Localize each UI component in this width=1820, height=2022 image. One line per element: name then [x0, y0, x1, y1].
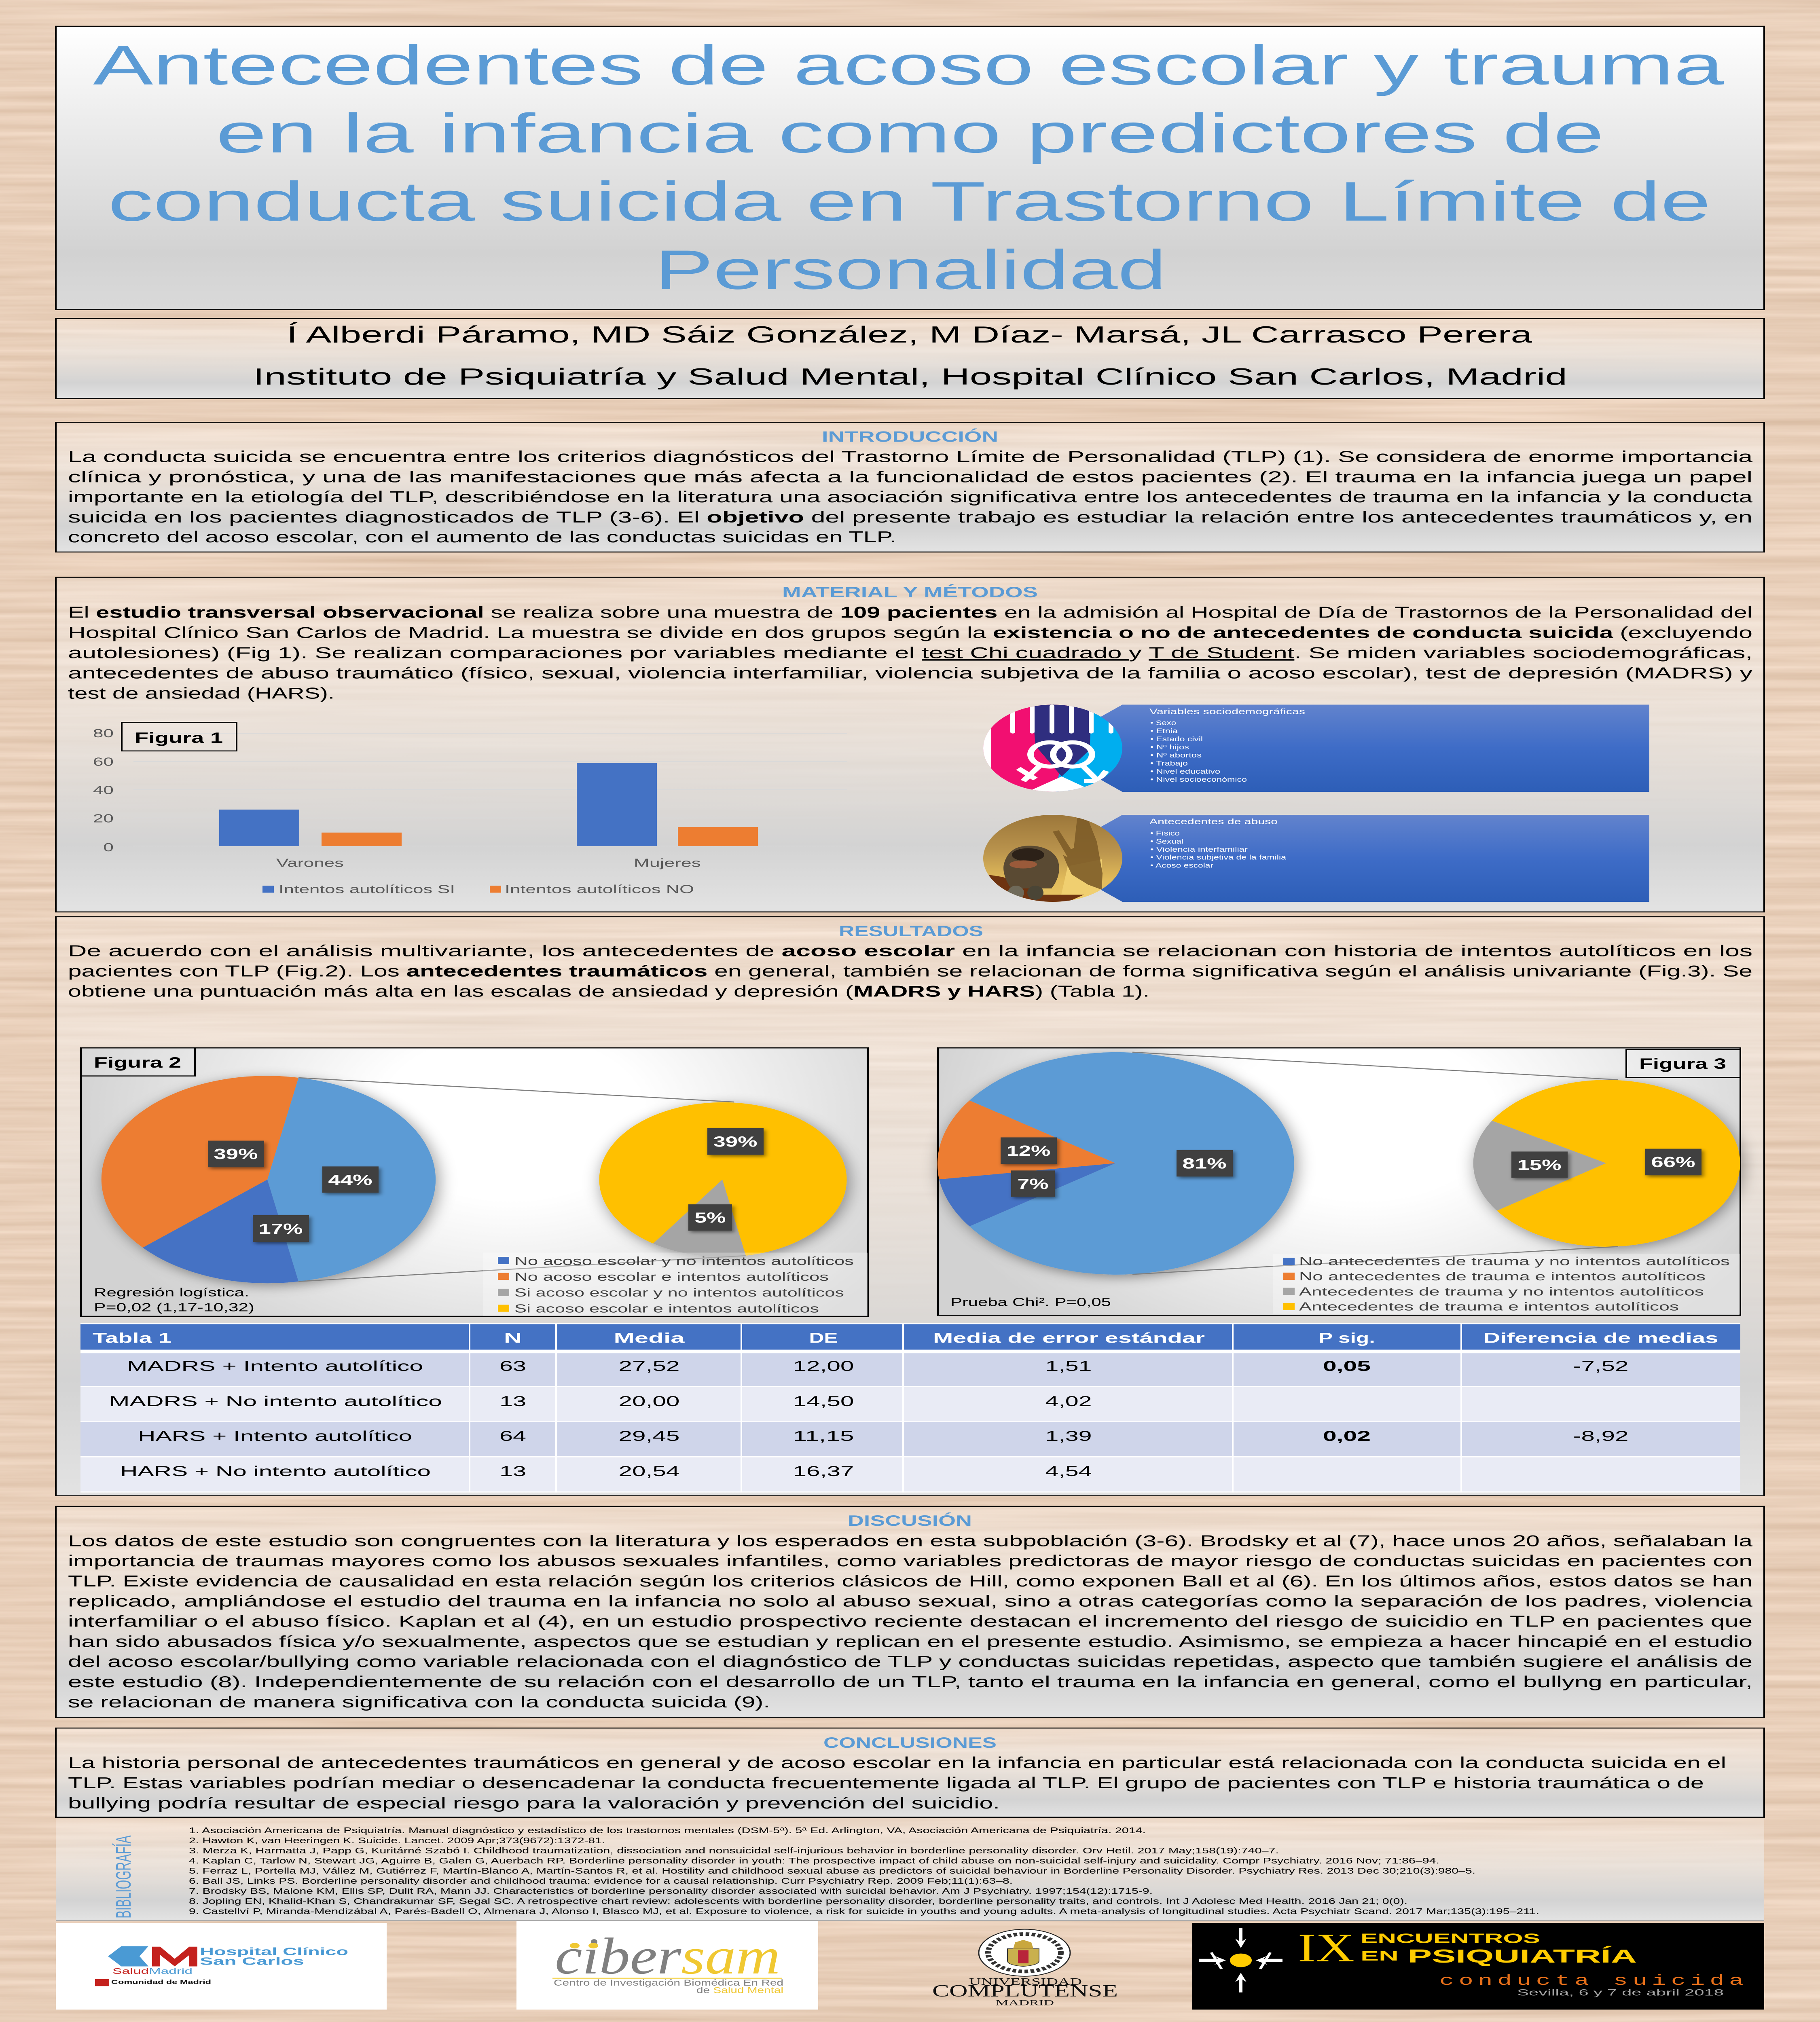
text block: conclusiones: [68, 1754, 1726, 1812]
text block: discusion: interfamiliar o el abuso físico. Kaplan et al (4), en un estudio prospectivo reciente destacan el incremento del riesgo de suicidio en TLP en pacientes que: [68, 1612, 1752, 1630]
secondary pie figura 2: [599, 1102, 847, 1257]
panel: variables sociodemograficas: • Etnia: [1150, 727, 1178, 735]
text block: discusion: replicado, ampliándose el estudio del trauma en la infancia no solo al abuso sexual, sino a otras categorías como la separación de los padres, violencia: [68, 1592, 1752, 1610]
figure label: figura 3: Figura 3: [1639, 1055, 1726, 1072]
legend figura 2: No acoso escolar y no intentos autolíticos: [514, 1255, 854, 1268]
table row: HARS + intento: 29,45: [618, 1428, 679, 1444]
icon: gender symbols circle: [983, 704, 1122, 792]
text block: introduccion: importante en la etiología del TLP, describiéndose en la literatura una asociación significativa entre los antecedentes de trauma en la infancia y la conducta: [68, 488, 1752, 506]
table row: MADRS + intento: 1,51: [1045, 1358, 1092, 1374]
panel: resultados: [56, 917, 1764, 1496]
table row: HARS + intento: 0,02: [1323, 1428, 1371, 1444]
panel: variables sociodemograficas: • Nivel educativo: [1150, 768, 1220, 775]
text block: references: 3. Merza K, Harmatta J, Papp G, Kuritárné Szabó I. Childhood traumatization, dissociation and nonsuicidal self-injurious behavior in borderline personality disorder. Orv Hetil. 2017 May;158(19):740–7.: [189, 1846, 1279, 1855]
bar chart: figura 1: [93, 727, 847, 896]
data labels figura 2: 39%: [713, 1134, 758, 1150]
table row: HARS + intento: -8,92: [1573, 1428, 1629, 1444]
logo: Universidad Complutense: MADRID: [996, 1999, 1054, 2007]
text block: material y metodos: El estudio transversal observacional se realiza sobre una muestra de 109 pacientes en la admisión al Hospital de Día de Trastornos de la Personalidad del: [68, 603, 1752, 621]
text block: references: 1. Asociación Americana de Psiquiatría. Manual diagnóstico y estadístico de los trastornos mentales (DSM-5ª). 5ª Ed. Arlington, VA, Asociación Americana de Psiquiatría. 2014.: [189, 1826, 1146, 1835]
title text: en la infancia como predictores de: [216, 102, 1604, 164]
logo: Hospital Clinico San Carlos: Hospital Clínico: [200, 1946, 348, 1957]
text block: references: 4. Kaplan C, Tarlow N, Stewart JG, Aguirre B, Galen G, Auerbach RP. Borderline personality disorder in youth: The prospective impact of child abuse on non-suicidal self-injury and suicidality. Compr Psychiatry. 2016 Nov; 71:86–94.: [189, 1856, 1439, 1865]
bar chart: figura 1: 0: [103, 841, 114, 854]
data labels figura 3: 7%: [1017, 1176, 1048, 1192]
table header: Diferencia de medias: [1484, 1330, 1718, 1346]
icon: complutense crest: [979, 1929, 1070, 1976]
logo: IX Encuentros en Psiquiatria: EN: [1361, 1948, 1399, 1964]
data labels figura 2: 17%: [259, 1221, 303, 1237]
data labels figura 2: 5%: [695, 1210, 726, 1226]
logo: Universidad Complutense: [932, 1929, 1118, 2007]
logo: cibersam: [516, 1921, 818, 2009]
table row: MADRS + no intento: MADRS + No intento autolítico: [109, 1393, 442, 1409]
table header: DE: [809, 1330, 838, 1346]
table header: Tabla 1: [93, 1330, 171, 1346]
legend figura 2: Si acoso escolar e intentos autolíticos: [514, 1302, 819, 1315]
panel: antecedentes de abuso: • Violencia subjetiva de la familia: [1150, 854, 1287, 861]
table row: MADRS + no intento: 20,00: [618, 1393, 679, 1409]
table row: MADRS + intento: 27,52: [618, 1358, 679, 1374]
table row: MADRS + no intento: 4,02: [1045, 1393, 1092, 1409]
data labels figura 2: 39%: [214, 1146, 258, 1162]
text block: introduccion: La conducta suicida se encuentra entre los criterios diagnósticos del Trastorno Límite de Personalidad (TLP) (1). Se considera de enorme importancia: [68, 448, 1752, 465]
panel: variables sociodemograficas: Variables sociodemográficas: [1149, 708, 1305, 716]
bar chart: figura 1: Mujeres: [634, 857, 701, 869]
table row: MADRS + no intento: 13: [499, 1393, 526, 1409]
table: tabla 1: [80, 1323, 1740, 1493]
table row: HARS + no intento: 16,37: [793, 1464, 854, 1479]
logo: cibersam: Centro de Investigación Biomédica En Red: [554, 1978, 783, 1988]
text block: references: 9. Castellví P, Miranda-Mendizábal A, Parés-Badell O, Almenara J, Alonso I, Blasco MJ, et al. Exposure to violence, a risk for suicide in youths and young adults. A meta-analysis of longitudinal studies. Acta Psychiatr Scand. 2017 Mar;135(3):195–211.: [189, 1907, 1539, 1916]
panel: introduccion: [56, 422, 1764, 552]
heading: material y metodos: MATERIAL Y MÉTODOS: [782, 584, 1038, 601]
text block: resultados: De acuerdo con el análisis multivariante, los antecedentes de acoso escolar en la infancia se relacionan con historia de intentos autolíticos en los: [68, 942, 1752, 960]
logo: IX Encuentros en Psiquiatria: conducta suicida: [1439, 1972, 1744, 1990]
table row: HARS + intento: 64: [499, 1428, 526, 1444]
panel: variables sociodemograficas: [1045, 704, 1649, 792]
legend figura 3: No antecedentes de trauma y no intentos autolíticos: [1299, 1255, 1730, 1268]
logo: Universidad Complutense: UNIVERSIDAD: [969, 1976, 1082, 1987]
bar chart: figura 1: 80: [93, 727, 114, 740]
panel: antecedentes de abuso: • Físico: [1150, 829, 1180, 837]
panel: conclusiones: [56, 1728, 1764, 1817]
table header: N: [504, 1330, 522, 1346]
data labels figura 3: [1001, 1137, 1701, 1197]
text block: discusion: este estudio (8). Independientemente de su relación con el desarrollo de un TLP, tanto el trauma en la infancia en general, como el bullyng en particular,: [68, 1673, 1752, 1690]
figure label: figura 2: Figura 2: [94, 1054, 181, 1071]
panel: antecedentes de abuso: • Sexual: [1150, 838, 1183, 845]
chart: figura 3: [938, 1048, 1740, 1315]
logo: cibersam: de Salud Mental: [696, 1986, 783, 1995]
note: regresion logistica: Regresión logística.: [94, 1286, 249, 1299]
bar chart: figura 1: Intentos autolíticos SI: [279, 883, 455, 896]
table row: HARS + no intento: 20,54: [618, 1464, 679, 1479]
bar chart: figura 1: Varones: [276, 857, 344, 869]
legend figura 3: No antecedentes de trauma e intentos autolíticos: [1299, 1270, 1706, 1283]
text block: introduccion: [68, 448, 1752, 546]
table row: HARS + no intento: HARS + No intento autolítico: [120, 1464, 431, 1479]
text block: conclusiones: La historia personal de antecedentes traumáticos en general y de acoso escolar en la infancia en particular está relacionada con la conducta suicida en el: [68, 1754, 1726, 1771]
chart: figura 2: [81, 1048, 868, 1316]
note: regresion logistica: P=0,02 (1,17-10,32): [94, 1301, 254, 1314]
table row: HARS + no intento: 4,54: [1045, 1464, 1092, 1479]
icon: child with hand shadow: [983, 815, 1122, 902]
heading: discusion: DISCUSIÓN: [848, 1512, 972, 1529]
table row: HARS + no intento: [120, 1464, 1092, 1479]
table header: [93, 1330, 1718, 1346]
logo: IX Encuentros en Psiquiatria: IX: [1298, 1925, 1354, 1970]
legend figura 3: [1273, 1254, 1740, 1314]
figure label: figura 1: [122, 722, 237, 751]
heading: resultados: RESULTADOS: [839, 922, 983, 939]
data labels figura 3: 15%: [1517, 1157, 1562, 1173]
panel: antecedentes de abuso: [1045, 815, 1649, 902]
affiliation line: Instituto de Psiquiatría y Salud Mental, Hospital Clínico San Carlos, Madrid: [253, 364, 1567, 390]
panel: variables sociodemograficas: • Nº hijos: [1150, 743, 1189, 751]
figure label: figura 2: [81, 1048, 195, 1076]
text block: introduccion: clínica y pronóstica, y una de las manifestaciones que más afecta a la funcionalidad de estos pacientes (2). El trauma en la infancia juega un papel: [68, 468, 1752, 486]
data labels figura 3: 66%: [1651, 1154, 1695, 1170]
table row: MADRS + intento: [127, 1358, 1629, 1374]
text block: discusion: TLP. Existe evidencia de causalidad en esta relación según los criterios clásicos de Hill, como exponen Ball et al (6). En los últimos años, estos datos se han: [68, 1572, 1752, 1590]
table header: Media: [614, 1330, 685, 1346]
data labels figura 3: 12%: [1006, 1143, 1051, 1159]
table row: MADRS + intento: 0,05: [1323, 1358, 1371, 1374]
text block: material y metodos: antecedentes de abuso traumático (físico, sexual, violencia interfamiliar, violencia subjetiva de la familia o acoso escolar), test de depresión (MADRS) y: [68, 664, 1752, 682]
text block: resultados: pacientes con TLP (Fig.2). Los antecedentes traumáticos en general, también se relacionan de forma significativa según el análisis univariante (Fig.3). Se: [68, 962, 1752, 980]
logo: Universidad Complutense: COMPLUTENSE: [932, 1981, 1118, 2001]
icon: arrows around yellow dot: [1199, 1928, 1282, 1992]
text block: material y metodos: Hospital Clínico San Carlos de Madrid. La muestra se divide en dos grupos según la existencia o no de antecedentes de conducta suicida (excluyendo: [68, 624, 1752, 641]
title text: conducta suicida en Trastorno Límite de: [108, 170, 1711, 233]
logo: IX Encuentros en Psiquiatria: Sevilla, 6 y 7 de abril 2018: [1517, 1988, 1724, 1998]
panel: authors: [56, 319, 1764, 399]
text block: discusion: [68, 1532, 1752, 1711]
panel: variables sociodemograficas: • Nivel socioeconómico: [1150, 776, 1247, 783]
text block: references: 5. Ferraz L, Portella MJ, Vállez M, Gutiérrez F, Martín-Blanco A, Martín-Santos R, et al. Hostility and childhood sexual abuse as predictors of suicidal behaviour in Borderline Personality Disorder. Psychiatry Res. 2013 Dec 30;210(3):980–5.: [189, 1866, 1475, 1876]
data labels figura 3: 81%: [1183, 1155, 1227, 1172]
heading: conclusiones: CONCLUSIONES: [823, 1734, 997, 1751]
text block: introduccion: concreto del acoso escolar, con el aumento de las conductas suicidas en TLP.: [68, 528, 896, 546]
table row: HARS + no intento: 13: [499, 1464, 526, 1479]
table row: MADRS + intento: -7,52: [1573, 1358, 1629, 1374]
table row: MADRS + intento: MADRS + Intento autolítico: [127, 1358, 423, 1374]
text block: discusion: Los datos de este estudio son congruentes con la literatura y los esperados en esta subpoblación (3-6). Brodsky et al (7), hace unos 20 años, señalaban la: [68, 1532, 1752, 1550]
panel: variables sociodemograficas: • Sexo: [1150, 719, 1176, 727]
legend figura 2: [483, 1253, 868, 1316]
data labels figura 2: [208, 1128, 764, 1242]
bar chart: figura 1: Intentos autolíticos NO: [505, 883, 694, 896]
logo: cibersam: cibersam: [555, 1927, 780, 1985]
text block: discusion: se relacionan de manera significativa con la conducta suicida (9).: [68, 1693, 770, 1711]
text block: discusion: importancia de traumas mayores como los abusos sexuales infantiles, como variables predictoras de mayor riesgo de conductas suicidas en pacientes con: [68, 1552, 1752, 1569]
text block: resultados: obtiene una puntuación más alta en las escalas de ansiedad y depresión (MADRS y HARS) (Tabla 1).: [68, 982, 1149, 1000]
text block: references: 8. Jopling EN, Khalid-Khan S, Chandrakumar SF, Segal SC. A retrospective chart review: adolescents with borderline personality disorder, borderline personality traits, and controls. Int J Adolesc Med Health. 2016 Jan 21; 0(0).: [189, 1897, 1407, 1906]
text block: resultados: [68, 942, 1752, 1000]
heading: bibliografia (rotated): BIBLIOGRAFÍA: [112, 1836, 135, 1918]
text block: conclusiones: TLP. Estas variables podrían mediar o desencadenar la conducta frecuentemente ligada al TLP. El grupo de pacientes con TLP e historia traumática o de: [68, 1774, 1704, 1791]
note: regresion logistica: [94, 1286, 254, 1314]
panel: antecedentes de abuso: • Acoso escolar: [1150, 862, 1213, 869]
logo: IX Encuentros en Psiquiatria: [1192, 1923, 1764, 2009]
text block: references: 2. Hawton K, van Heeringen K. Suicide. Lancet. 2009 Apr;373(9672):1372-81.: [189, 1836, 605, 1845]
table row: MADRS + intento: 12,00: [793, 1358, 854, 1374]
bar chart: figura 1: 20: [93, 812, 114, 825]
table row: MADRS + intento: 63: [499, 1358, 526, 1374]
logo: IX Encuentros en Psiquiatria: PSIQUIATRÍA: [1408, 1946, 1637, 1967]
text block: material y metodos: test de ansiedad (HARS).: [68, 684, 334, 702]
main pie figura 3: [938, 1052, 1294, 1275]
logo: Hospital Clinico San Carlos: Salud Madrid: [112, 1967, 193, 1976]
legend figura 2: No acoso escolar e intentos autolíticos: [514, 1270, 829, 1284]
figure label: figura 3: [1626, 1049, 1740, 1077]
panel: variables sociodemograficas: • Nº abortos: [1150, 751, 1202, 759]
legend figura 3: Antecedentes de trauma e intentos autolíticos: [1299, 1300, 1679, 1313]
text block: references: 6. Ball JS, Links PS. Borderline personality disorder and childhood trauma: evidence for a causal relationship. Curr Psychiatry Rep. 2009 Feb;11(1):63–8.: [189, 1876, 1013, 1886]
bar chart: figura 1: 60: [93, 755, 114, 768]
table row: HARS + intento: 1,39: [1045, 1428, 1092, 1444]
title text: Personalidad: [655, 239, 1166, 301]
table row: HARS + intento: [138, 1428, 1629, 1444]
text block: conclusiones: bullying podría resultar de especial riesgo para la valoración y prevención del suicidio.: [68, 1794, 1000, 1812]
panel: material y metodos: [56, 577, 1764, 912]
figure label: figura 1: Figura 1: [135, 729, 223, 746]
text block: discusion: del acoso escolar/bullying como variable relacionada con el diagnóstico de TLP y conductas suicidas repetidas, aspecto que también sugiere el análisis de: [68, 1653, 1752, 1670]
secondary pie figura 3: [1473, 1080, 1740, 1247]
panel: title: [56, 26, 1764, 310]
text block: material y metodos: [68, 603, 1752, 702]
text block: material y metodos: autolesiones) (Fig 1). Se realizan comparaciones por variables mediante el test Chi cuadrado y T de Student. Se miden variables sociodemográficas,: [68, 644, 1752, 662]
panel: discusion: [56, 1506, 1764, 1718]
title text: Antecedentes de acoso escolar y trauma: [93, 34, 1724, 96]
logo: IX Encuentros en Psiquiatria: ENCUENTROS: [1361, 1931, 1540, 1946]
table header: P sig.: [1318, 1330, 1375, 1346]
table row: MADRS + no intento: [109, 1393, 1092, 1409]
legend figura 3: Antecedentes de trauma y no intentos autolíticos: [1299, 1285, 1704, 1298]
note: prueba chi: Prueba Chi². P=0,05: [950, 1296, 1111, 1309]
text block: references: [189, 1826, 1539, 1916]
text block: discusion: han sido abusados física y/o sexualmente, aspectos que se estudian y replican en el presente estudio. Asimismo, se empieza a hacer hincapié en el estudio: [68, 1633, 1752, 1650]
title text: [93, 34, 1724, 301]
text block: introduccion: suicida en los pacientes diagnosticados de TLP (3-6). El objetivo del presente trabajo es estudiar la relación entre los antecedentes traumáticos y, en: [68, 508, 1752, 526]
data labels figura 2: 44%: [328, 1172, 372, 1188]
heading: introduccion: INTRODUCCIÓN: [822, 428, 998, 445]
table row: HARS + intento: HARS + Intento autolítico: [138, 1428, 412, 1444]
panel: antecedentes de abuso: Antecedentes de abuso: [1149, 818, 1278, 826]
table row: HARS + intento: 11,15: [793, 1428, 854, 1444]
bar chart: figura 1: 40: [93, 784, 114, 797]
logo: Hospital Clinico San Carlos: Comunidad de Madrid: [111, 1979, 211, 1986]
logo: Hospital Clinico San Carlos: San Carlos: [200, 1956, 304, 1967]
panel: antecedentes de abuso: • Violencia interfamiliar: [1150, 846, 1248, 853]
text block: references: 7. Brodsky BS, Malone KM, Ellis SP, Dulit RA, Mann JJ. Characteristics of borderline personality disorder associated with suicidal behavior. Am J Psychiatry. 1997;154(12):1715-9.: [189, 1887, 1153, 1896]
logo: Hospital Clinico San Carlos: [56, 1923, 387, 2009]
main pie figura 2: [102, 1076, 436, 1283]
authors line: Í Alberdi Páramo, MD Sáiz González, M Díaz- Marsá, JL Carrasco Perera: [287, 322, 1532, 348]
panel: variables sociodemograficas: • Estado civil: [1150, 735, 1203, 743]
table row: MADRS + no intento: 14,50: [793, 1393, 854, 1409]
panel: variables sociodemograficas: • Trabajo: [1150, 759, 1188, 767]
table header: Media de error estándar: [933, 1330, 1205, 1346]
legend figura 2: Si acoso escolar y no intentos autolíticos: [514, 1286, 844, 1299]
panel: bibliografia: [56, 1818, 1764, 1920]
